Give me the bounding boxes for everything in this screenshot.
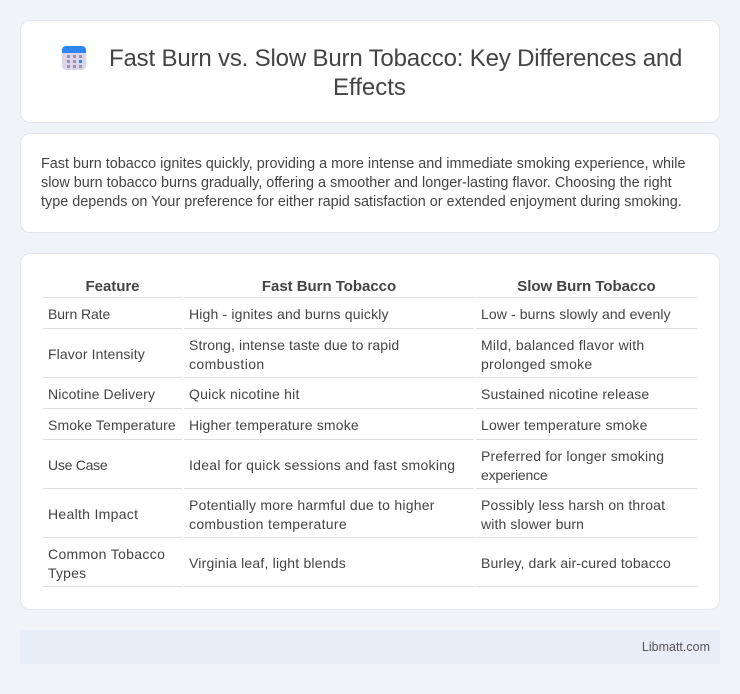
row: health impact: with slower burn: [481, 516, 584, 532]
footer: [20, 630, 720, 664]
row: flavor intensity: prolonged smoke: [481, 356, 592, 372]
icon: calendar: [62, 46, 86, 70]
panel: title card: [20, 20, 720, 123]
row: smoke temperature: Smoke Temperature: [48, 417, 176, 433]
row: burn rate: High - ignites and burns quickly: [189, 306, 389, 322]
row: health impact: Potentially more harmful due to higher: [189, 497, 435, 513]
panel: comparison table card: [20, 253, 720, 610]
row: nicotine delivery: Sustained nicotine release: [481, 386, 649, 402]
row: use case: Preferred for longer smoking: [481, 448, 664, 464]
row: flavor intensity: Strong, intense taste due to rapid: [189, 337, 399, 353]
row: flavor intensity: Mild, balanced flavor with: [481, 337, 644, 353]
row: flavor intensity: combustion: [189, 356, 265, 372]
row: health impact: Possibly less harsh on throat: [481, 497, 665, 513]
row: use case: Ideal for quick sessions and fast smoking: [189, 457, 455, 473]
footer credit: Libmatt.com: [642, 640, 710, 654]
intro text: [41, 156, 685, 210]
row: nicotine delivery: Nicotine Delivery: [48, 386, 155, 402]
intro text: Fast burn tobacco ignites quickly, providing a more intense and immediate smoking experience, while: [41, 156, 685, 172]
row: nicotine delivery: Quick nicotine hit: [189, 386, 300, 402]
table header: Slow Burn Tobacco: [517, 278, 656, 295]
row: burn rate: Low - burns slowly and evenly: [481, 306, 671, 322]
intro text: slow burn tobacco burns gradually, offering a smoother and longer-lasting flavor. Choosing the right: [41, 175, 672, 191]
row: common tobacco types: Virginia leaf, light blends: [189, 555, 346, 571]
title: Fast Burn vs. Slow Burn Tobacco: Key Differences and: [109, 45, 682, 72]
row: common tobacco types: Types: [48, 565, 86, 581]
row: use case: experience: [481, 467, 548, 483]
row: smoke temperature: Lower temperature smoke: [481, 417, 648, 433]
row: health impact: combustion temperature: [189, 516, 347, 532]
row: flavor intensity: Flavor Intensity: [48, 346, 145, 362]
row: common tobacco types: Common Tobacco: [48, 546, 165, 562]
intro text: type depends on Your preference for either rapid satisfaction or extended enjoyment during smoking.: [41, 194, 682, 210]
row: burn rate: Burn Rate: [48, 306, 110, 322]
table header: Fast Burn Tobacco: [262, 278, 396, 295]
title: [109, 45, 682, 101]
row: use case: Use Case: [48, 457, 107, 473]
row: smoke temperature: Higher temperature smoke: [189, 417, 359, 433]
row: health impact: Health Impact: [48, 506, 138, 522]
row: common tobacco types: Burley, dark air-cured tobacco: [481, 555, 671, 571]
title: Effects: [333, 74, 406, 101]
table header: Feature: [86, 278, 139, 295]
panel: intro text card: [20, 133, 720, 233]
